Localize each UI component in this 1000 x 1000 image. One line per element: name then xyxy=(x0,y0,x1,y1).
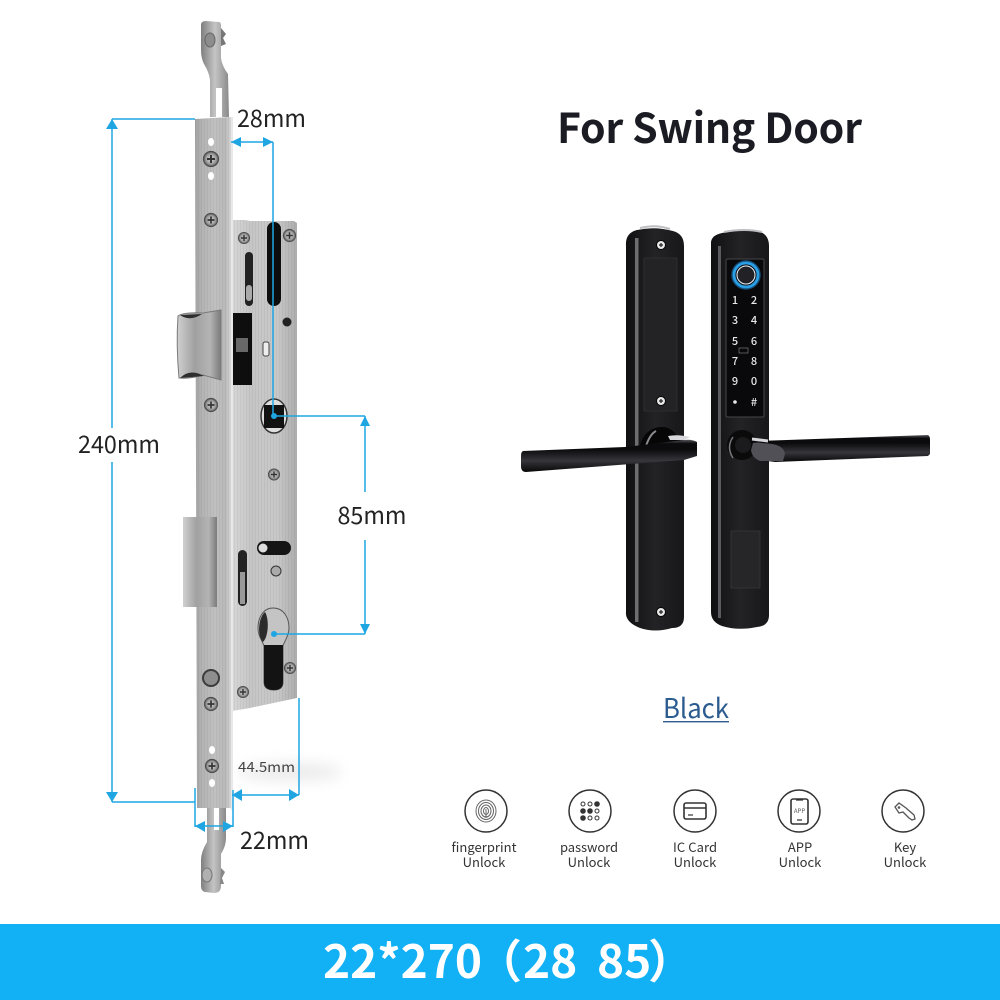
panel: rear handle plate xyxy=(521,226,697,630)
keypad digits: 0 xyxy=(751,373,757,389)
icon: fingerprint unlock xyxy=(452,790,517,871)
icon: app unlock: APP xyxy=(788,837,812,856)
icon: IC card unlock: IC Card xyxy=(673,837,717,856)
icon: key unlock xyxy=(882,790,927,871)
keypad digits xyxy=(732,292,757,410)
title: For Swing Door xyxy=(557,95,862,155)
panel: mortise lock body xyxy=(177,21,342,893)
icon: password unlock: Unlock xyxy=(568,852,611,871)
latch bolt xyxy=(177,310,221,380)
keypad digits: 1 xyxy=(732,292,738,308)
bottom banner: （ xyxy=(476,926,522,992)
icon: key unlock: Key xyxy=(894,837,916,856)
case xyxy=(231,220,297,711)
keypad digits: 9 xyxy=(732,373,738,389)
icon: IC card unlock xyxy=(673,790,717,871)
cylinder hole xyxy=(258,608,289,690)
top rod xyxy=(201,21,229,117)
icon: key unlock: Unlock xyxy=(884,852,927,871)
screws xyxy=(203,151,219,167)
color label: Black xyxy=(663,687,729,726)
spindle hole xyxy=(261,399,287,433)
label: 240mm: 240mm xyxy=(78,425,160,460)
icon: IC card unlock: Unlock xyxy=(674,852,717,871)
keypad digits: 6 xyxy=(751,333,757,349)
label: 28mm: 28mm xyxy=(237,99,306,134)
icon: app unlock: APP xyxy=(794,806,805,815)
icon: fingerprint unlock: fingerprint xyxy=(452,837,517,856)
icon: password unlock xyxy=(560,790,618,871)
bottom rod xyxy=(201,806,226,893)
bottom banner: 28 xyxy=(523,926,577,992)
icon: app unlock xyxy=(778,790,822,871)
front lever xyxy=(760,435,930,462)
bottom banner: 22*270 xyxy=(323,926,482,992)
icon: password unlock: password xyxy=(560,837,618,856)
keypad digits: 5 xyxy=(732,333,738,349)
keypad digits: 3 xyxy=(732,312,738,328)
bottom banner xyxy=(0,924,1000,1000)
label: 85mm: 85mm xyxy=(338,496,406,531)
case slots xyxy=(267,222,281,306)
bottom banner: ） xyxy=(648,926,694,992)
icon: app unlock: Unlock xyxy=(779,852,822,871)
bottom banner: 85 xyxy=(597,926,651,992)
slots lower xyxy=(257,541,291,555)
keypad digits: 7 xyxy=(732,353,738,369)
panel: front handle with keypad xyxy=(711,230,930,629)
label: 44.5mm: 44.5mm xyxy=(238,757,295,777)
fingerprint sensor ring xyxy=(732,261,760,289)
keypad digits: 2 xyxy=(751,292,757,308)
dimension lines and arrows xyxy=(106,119,370,832)
dead bolt xyxy=(183,517,217,607)
keypad digits: # xyxy=(751,394,757,410)
faceplate xyxy=(195,117,231,808)
label: 22mm: 22mm xyxy=(240,821,309,856)
keypad digits: 8 xyxy=(751,353,757,369)
rear lever xyxy=(521,440,697,472)
keypad screen xyxy=(726,259,764,417)
icon: fingerprint unlock: Unlock xyxy=(463,852,506,871)
keypad digits: 4 xyxy=(751,312,757,328)
